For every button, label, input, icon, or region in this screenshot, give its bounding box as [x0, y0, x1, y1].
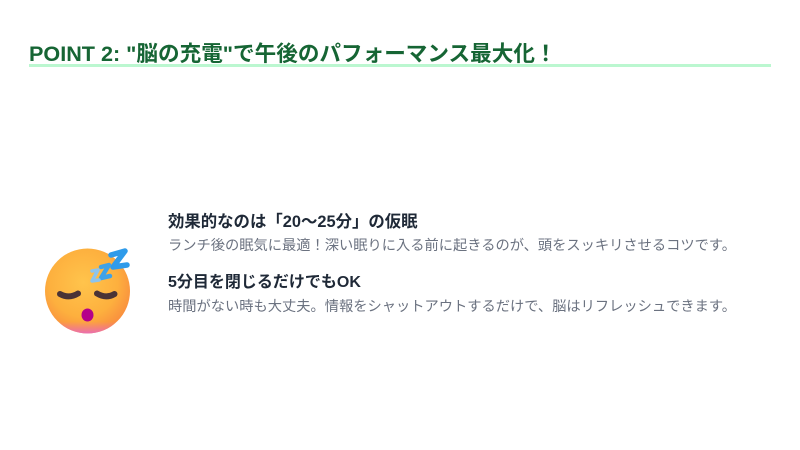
face	[45, 248, 130, 334]
text block 2 body: 時間がない時も大丈夫。情報をシャットアウトするだけで、脳はリフレッシュできます。	[168, 299, 736, 315]
snore letters	[92, 251, 127, 281]
text block 2 heading: 5分目を閉じるだけでもOK	[168, 274, 361, 291]
title underline	[29, 64, 771, 67]
text block 1 body: ランチ後の眠気に最適！深い眠りに入る前に起きるのが、頭をスッキリさせるコツです。	[168, 238, 736, 254]
icon: sleeping face	[45, 248, 130, 334]
eyes	[60, 294, 114, 296]
text block 1 heading: 効果的なのは「20～25分」の仮眠	[168, 213, 418, 231]
title: POINT 2: "脳の充電"で午後のパフォーマンス最大化！	[29, 41, 557, 66]
mouth	[82, 308, 94, 322]
